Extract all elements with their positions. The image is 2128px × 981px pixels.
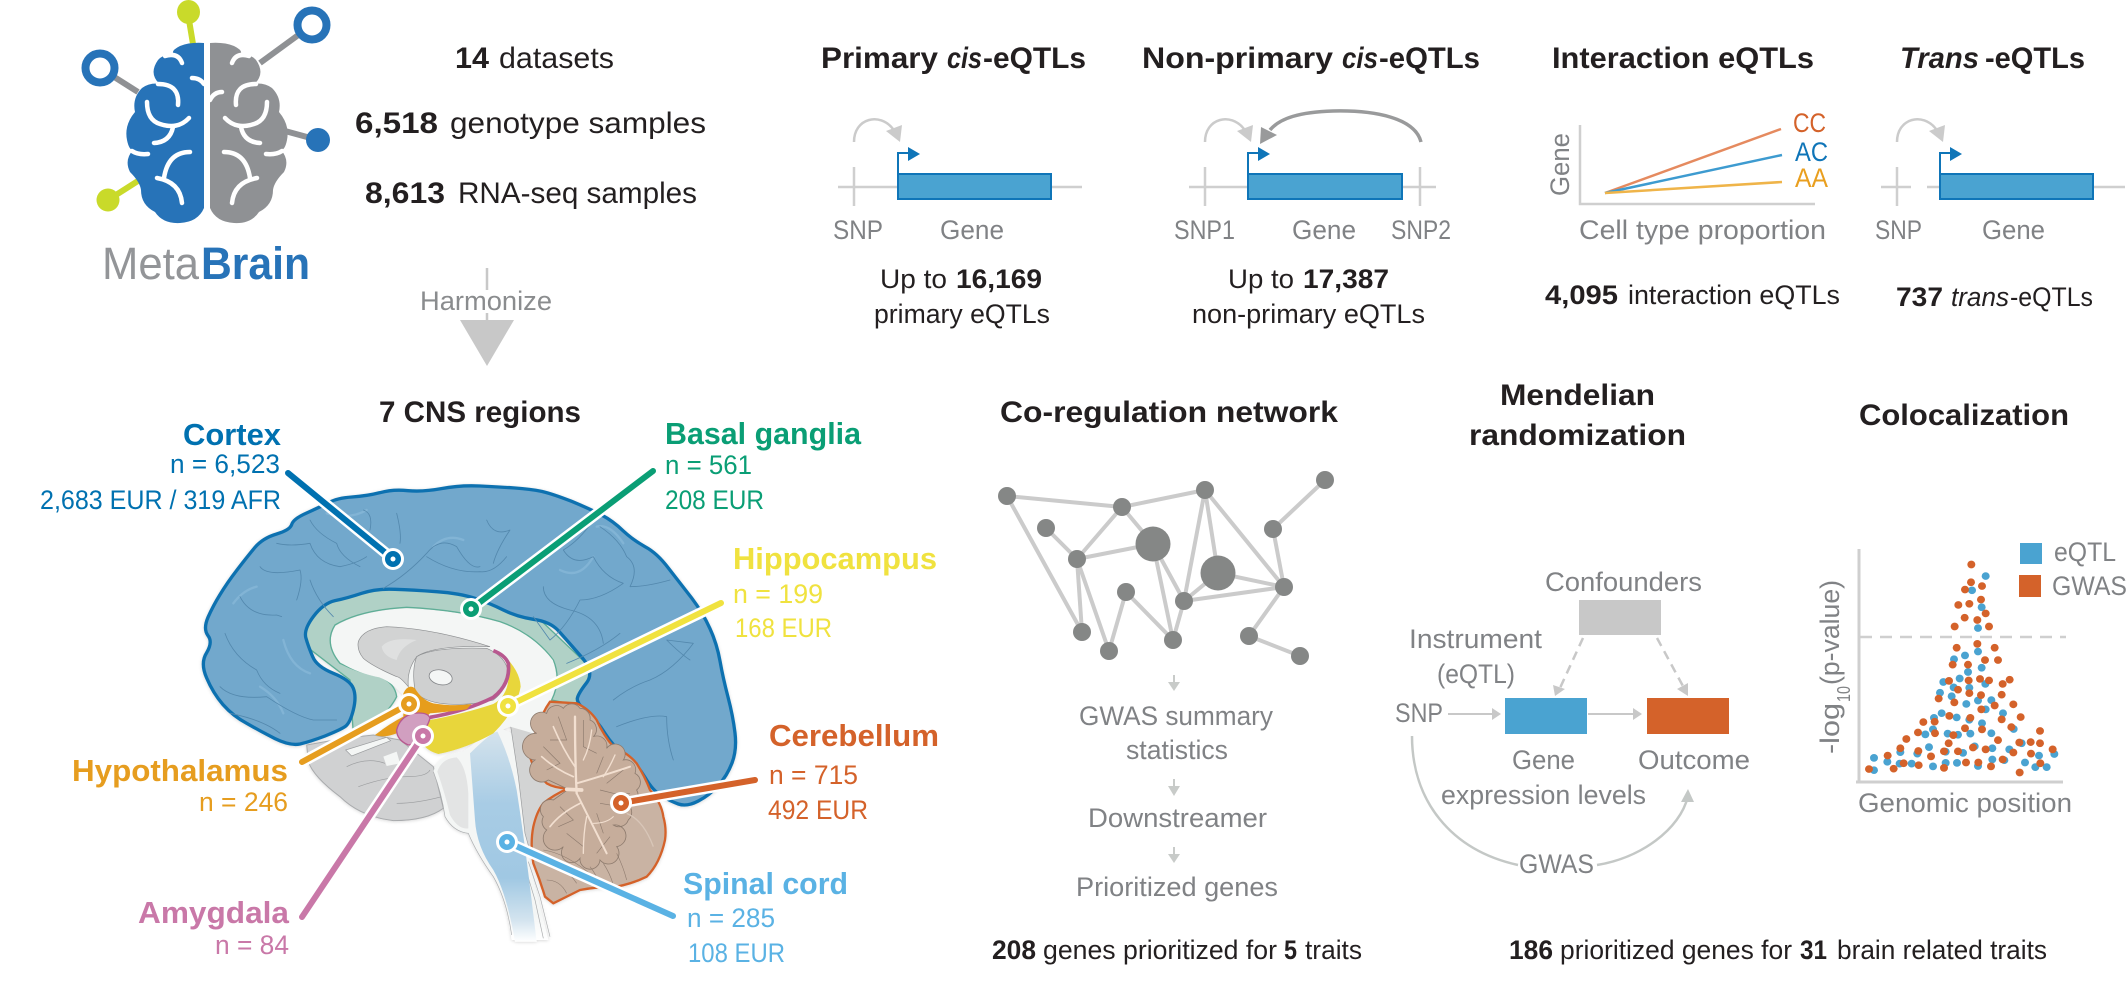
gene diagram: non-primary	[1174, 111, 1451, 245]
basal ganglia label	[665, 416, 862, 515]
amygdala label: n = 84	[215, 930, 289, 960]
cerebellum label: n = 715	[769, 760, 858, 790]
dataset statistics: RNA-seq samples	[458, 177, 697, 210]
logo connector lines	[100, 14, 318, 200]
gene diagram: primary	[833, 119, 1082, 245]
heading: 7 CNS regions: 7 CNS regions	[379, 396, 581, 429]
basal ganglia leader	[460, 471, 653, 620]
hippocampus label: Hippocampus	[733, 541, 937, 576]
y axis label: -log	[1815, 703, 1845, 754]
dataset statistics: 6,518	[355, 107, 438, 140]
hypothalamus leader	[302, 693, 420, 762]
region: hippocampus callout	[497, 541, 937, 717]
hippocampus label: n = 199	[733, 579, 823, 609]
heading: primary cis-eQTLs	[821, 42, 1086, 75]
cortex label: n = 6,523	[170, 449, 280, 479]
cortex label: Cortex	[183, 417, 282, 452]
region: basal ganglia callout	[460, 416, 862, 620]
workflow steps	[1076, 675, 1278, 902]
cortex label: 2,683 EUR / 319 AFR	[40, 485, 281, 515]
line chart: interaction: AC	[1795, 137, 1828, 167]
panel: interaction eQTLs	[1545, 42, 1840, 310]
result: non-primary eQTLs	[1192, 264, 1425, 329]
workflow steps: statistics	[1126, 735, 1228, 765]
heading: Mendelian randomization: Mendelian	[1500, 379, 1655, 412]
result: prioritized genes: 5	[1284, 935, 1297, 965]
y axis label: 10	[1834, 686, 1854, 702]
result: brain related traits	[1509, 935, 2047, 965]
cortex leader	[288, 473, 404, 570]
ventricle	[428, 668, 454, 687]
cerebellum label: Cerebellum	[769, 718, 939, 753]
panel: trans-eQTLs	[1875, 42, 2125, 312]
logo wordmark: Brain	[201, 238, 310, 289]
result: non-primary eQTLs: 17,387	[1303, 264, 1389, 294]
result: non-primary eQTLs: Up to	[1228, 264, 1294, 294]
region: spinal cord callout	[496, 831, 848, 968]
spinal cord	[470, 730, 537, 942]
heading: trans-eQTLs: Trans	[1900, 42, 1979, 75]
dataset statistics: datasets	[499, 42, 614, 75]
MetaBrain logo	[86, 0, 330, 289]
line chart: interaction: CC	[1793, 108, 1826, 138]
hippocampus label: 168 EUR	[735, 613, 832, 643]
region: cortex callout	[40, 417, 404, 570]
y axis label	[1815, 580, 1854, 754]
logo nodes	[86, 0, 330, 212]
amygdala leader	[302, 725, 434, 917]
result: brain related traits: 31	[1800, 935, 1827, 965]
gene diagram: primary: SNP	[833, 215, 883, 245]
result: prioritized genes: 208	[992, 935, 1036, 965]
GWAS points	[1865, 561, 2057, 776]
gene diagram: trans	[1875, 119, 2125, 245]
result: trans-eQTLs: 737	[1896, 282, 1943, 312]
heading: primary cis-eQTLs: -eQTLs	[983, 42, 1086, 75]
basal ganglia label: Basal ganglia	[665, 416, 862, 451]
logo wordmark	[102, 238, 310, 289]
cerebellum	[522, 702, 666, 903]
result: prioritized genes: traits	[1305, 935, 1362, 965]
panel: primary cis-eQTLs	[821, 42, 1086, 329]
logo grey hemisphere	[210, 43, 288, 223]
panel: colocalization	[1815, 399, 2127, 818]
heading: interaction eQTLs: Interaction eQTLs	[1552, 42, 1814, 75]
panel: Mendelian randomization	[1395, 379, 2047, 965]
cortex label	[40, 417, 282, 515]
heading: non-primary cis-eQTLs: cis	[1342, 42, 1378, 75]
hypothalamus label	[72, 753, 288, 817]
hypothalamus	[375, 687, 472, 736]
heading: Mendelian randomization	[1469, 379, 1686, 452]
grey tissue behind brainstem	[510, 722, 567, 863]
green basal ganglia band	[300, 583, 597, 735]
hypothalamus label: n = 246	[199, 787, 288, 817]
causal diagram: Instrument	[1409, 624, 1543, 654]
result: interaction eQTLs: 4,095	[1545, 280, 1618, 310]
legend	[2019, 537, 2127, 601]
harmonize arrow: Harmonize	[420, 286, 552, 316]
network graph	[998, 471, 1334, 665]
basal ganglia label: 208 EUR	[665, 485, 764, 515]
dataset statistics: genotype samples	[450, 107, 706, 140]
panel: co-regulation network	[992, 396, 1362, 965]
line chart: interaction: Cell type proportion	[1579, 215, 1826, 245]
amygdala label	[138, 895, 290, 960]
brain illustration	[203, 486, 736, 942]
result: prioritized genes: genes prioritized for	[1043, 935, 1277, 965]
sheath outlines	[433, 772, 550, 938]
cortex	[203, 486, 736, 805]
forebrain underside	[307, 735, 443, 821]
result: non-primary eQTLs: non-primary eQTLs	[1192, 299, 1425, 329]
causal diagram: Outcome	[1638, 745, 1750, 775]
legend: eQTL	[2054, 537, 2116, 567]
spinal cord label	[683, 866, 848, 968]
result: trans-eQTLs: -eQTLs	[2010, 282, 2093, 312]
dataset statistics: 14	[455, 42, 489, 75]
line chart: interaction: Gene	[1545, 133, 1575, 196]
heading: co-regulation network: Co-regulation network	[1000, 396, 1338, 429]
basal ganglia label: n = 561	[665, 450, 752, 480]
fornix stripe	[430, 651, 509, 717]
hippocampus leader	[497, 603, 721, 717]
region: amygdala callout	[138, 725, 434, 960]
result: prioritized genes	[992, 935, 1362, 965]
cerebellar foliage	[522, 704, 640, 869]
result: primary eQTLs	[874, 264, 1050, 329]
logo wordmark: Meta	[102, 238, 200, 289]
hippocampus label	[733, 541, 937, 643]
region: cerebellum callout	[610, 718, 939, 825]
brainstem sheath	[433, 727, 548, 940]
eQTL points	[1870, 572, 2058, 774]
gene diagram: trans: SNP	[1875, 215, 1922, 245]
result: brain related traits: brain related traits	[1837, 935, 2047, 965]
result: trans-eQTLs: trans	[1951, 282, 2009, 312]
spinal cord label: 108 EUR	[688, 938, 785, 968]
gene diagram: trans: Gene	[1982, 215, 2045, 245]
workflow steps: Prioritized genes	[1076, 872, 1278, 902]
spinal cord label: Spinal cord	[683, 866, 848, 901]
result: interaction eQTLs: interaction eQTLs	[1628, 280, 1840, 310]
heading: primary cis-eQTLs: Primary	[821, 42, 938, 75]
workflow steps: Downstreamer	[1088, 803, 1267, 833]
hypothalamus label: Hypothalamus	[72, 753, 288, 788]
cerebellum label	[768, 718, 939, 825]
spinal cord leader	[496, 831, 673, 916]
amygdala	[397, 713, 430, 745]
harmonize arrow	[420, 268, 552, 366]
cerebellum leader	[610, 780, 755, 814]
logo blue hemisphere	[126, 43, 204, 223]
panel: non-primary cis-eQTLs	[1142, 42, 1480, 329]
region: hypothalamus callout	[72, 693, 420, 817]
result: brain related traits: 186	[1509, 935, 1553, 965]
white matter	[331, 608, 556, 743]
heading: non-primary cis-eQTLs: Non-primary	[1142, 42, 1333, 75]
causal diagram	[1395, 567, 1750, 879]
causal diagram: (eQTL)	[1437, 659, 1515, 689]
thalamus	[414, 648, 508, 704]
causal diagram: GWAS	[1519, 849, 1594, 879]
gene diagram: non-primary: SNP2	[1391, 215, 1451, 245]
heading: non-primary cis-eQTLs: -eQTLs	[1379, 42, 1480, 75]
causal diagram: Gene	[1512, 745, 1575, 775]
hippocampus	[423, 653, 521, 754]
result: brain related traits: prioritized genes for	[1560, 935, 1792, 965]
dataset statistics: 8,613	[365, 177, 445, 210]
gene diagram: non-primary: SNP1	[1174, 215, 1235, 245]
heading: Mendelian randomization: randomization	[1469, 419, 1686, 452]
spinal cord label: n = 285	[687, 903, 775, 933]
y axis label: (p-value)	[1815, 580, 1845, 685]
gene diagram: non-primary: Gene	[1292, 215, 1356, 245]
heading: non-primary cis-eQTLs	[1142, 42, 1480, 75]
result: trans-eQTLs	[1896, 282, 2093, 312]
pons	[437, 757, 468, 828]
line chart: interaction: AA	[1795, 163, 1828, 193]
causal diagram: SNP	[1395, 698, 1443, 728]
causal diagram: Confounders	[1545, 567, 1702, 597]
heading: colocalization: Colocalization	[1859, 399, 2069, 432]
scatter chart	[1815, 549, 2072, 818]
workflow steps: GWAS summary	[1079, 701, 1273, 731]
heading: trans-eQTLs	[1900, 42, 2085, 75]
causal diagram: expression levels	[1441, 780, 1646, 810]
caudate	[358, 627, 490, 687]
x axis label: Genomic position	[1858, 788, 2072, 818]
cerebellum label: 492 EUR	[768, 795, 868, 825]
result: primary eQTLs: Up to	[880, 264, 947, 294]
line chart: interaction	[1545, 108, 1828, 245]
dataset statistics	[355, 42, 706, 210]
result: primary eQTLs: 16,169	[956, 264, 1042, 294]
result: primary eQTLs: primary eQTLs	[874, 299, 1050, 329]
gene diagram: primary: Gene	[940, 215, 1004, 245]
heading: primary cis-eQTLs: cis	[947, 42, 982, 75]
amygdala label: Amygdala	[138, 895, 290, 930]
heading: trans-eQTLs: -eQTLs	[1985, 42, 2085, 75]
